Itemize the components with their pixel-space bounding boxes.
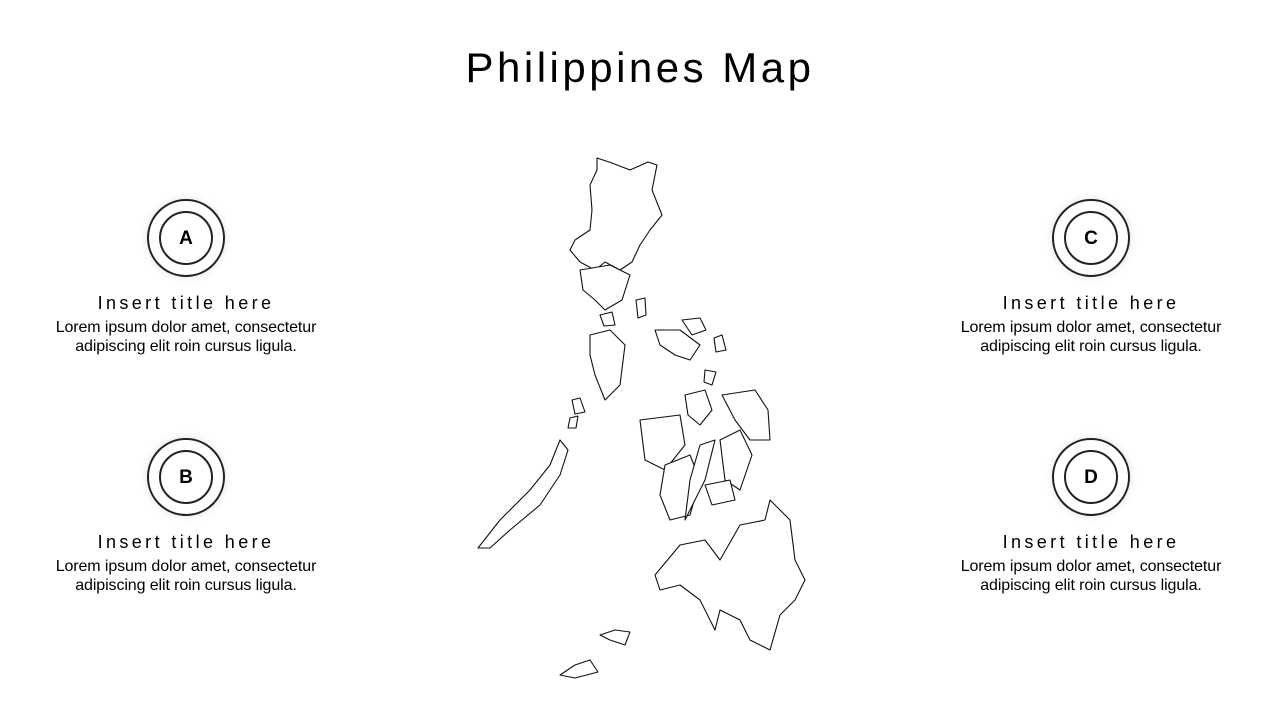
- icon: circle A: A: [179, 228, 193, 249]
- icon: circle C: [1052, 199, 1130, 277]
- text B: Lorem ipsum dolor amet, consectetur: [56, 558, 316, 575]
- text B: adipiscing elit roin cursus ligula.: [75, 577, 297, 594]
- text C: [961, 319, 1222, 355]
- text A: adipiscing elit roin cursus ligula.: [75, 338, 297, 355]
- text C: adipiscing elit roin cursus ligula.: [980, 338, 1202, 355]
- item D: [961, 436, 1222, 594]
- text C: Lorem ipsum dolor amet, consectetur: [961, 319, 1221, 336]
- icon: circle D: [1052, 438, 1130, 516]
- heading D: Insert title here: [1003, 532, 1179, 552]
- item C: [961, 197, 1222, 355]
- item B: [56, 436, 316, 594]
- heading B: Insert title here: [98, 532, 274, 552]
- heading C: Insert title here: [1003, 293, 1179, 313]
- text A: Lorem ipsum dolor amet, consectetur: [56, 319, 316, 336]
- text D: [961, 558, 1222, 594]
- text D: Lorem ipsum dolor amet, consectetur: [961, 558, 1221, 575]
- text B: [56, 558, 316, 594]
- icon: circle A: [147, 199, 225, 277]
- icon: circle D: D: [1084, 467, 1098, 488]
- item A: [56, 197, 316, 355]
- heading A: Insert title here: [98, 293, 274, 313]
- text A: [56, 319, 316, 355]
- icon: circle B: B: [179, 467, 193, 488]
- icon: circle C: C: [1084, 228, 1098, 249]
- title: Philippines Map: [465, 44, 814, 91]
- text D: adipiscing elit roin cursus ligula.: [980, 577, 1202, 594]
- icon: circle B: [147, 438, 225, 516]
